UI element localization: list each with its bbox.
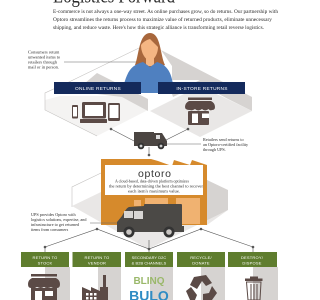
connector: devices to truck to store: [110, 128, 189, 156]
channel: return to vendor: VENDOR: [88, 260, 106, 266]
panel: in-store returns hexagon: [150, 50, 252, 137]
channel: destroy dispose: DISPOSE: [242, 260, 262, 266]
callout: consumers: unwanted items to: [28, 54, 61, 60]
callout: consumers: retailers through: [28, 60, 58, 64]
panel: optoro warehouse: [101, 159, 207, 225]
channel: return to stock: [21, 252, 69, 267]
icon: store: [185, 98, 215, 125]
channel: return to stock: STOCK: [38, 260, 52, 266]
intro text: [53, 10, 279, 31]
panel: optoro warehouse: each item's maximum value.: [128, 190, 180, 194]
online returns heading: [54, 82, 141, 94]
callout: retailers: Retailers send returns to: [203, 137, 244, 142]
intro text: Optoro streamlines the returns process to maximize value of returned products, eliminate unnecessary: [53, 18, 273, 23]
channel column backgrounds: [45, 267, 278, 300]
panel: online returns hexagon: [45, 48, 148, 136]
channel: secondary channels: SECONDARY D2C: [132, 255, 166, 260]
callout: UPS: [31, 212, 117, 232]
optoro logo: optoro: [138, 168, 171, 180]
channel: recycle donate: RECYCLE/: [190, 255, 212, 260]
callout: consumers: [28, 50, 138, 70]
channel: return to vendor: RETURN TO: [84, 255, 110, 260]
channel: recycle donate: [177, 252, 225, 267]
in-store returns heading: IN-STORE RETURNS: [176, 86, 228, 92]
channel: return to vendor: [72, 252, 121, 267]
logos: blinq bulq: [129, 276, 169, 300]
callout: retailers: through UPS.: [203, 147, 226, 152]
channel: destroy dispose: [228, 252, 277, 267]
icon: factory: [82, 275, 108, 300]
channel: return to stock: RETURN TO: [32, 255, 58, 260]
icon: large truck: [117, 204, 184, 238]
intro text: shipping, and reduce waste. Here's how this strategic alliance is transforming retail reverse logistics.: [53, 26, 264, 31]
icon: trash can: [245, 276, 262, 300]
intro text: E-commerce is not always a one-way street. As online purchases grow, so do returns. Our partnership with: [53, 10, 279, 15]
callout: retailers: an Optoro-certified facility: [203, 142, 249, 147]
panel: lower isometric floor: [72, 173, 228, 249]
icon: recycle: [186, 275, 217, 300]
callout: retailers: [167, 137, 249, 152]
in-store returns heading: [158, 82, 245, 94]
logos: blinq bulq: BLINQ: [133, 276, 165, 287]
optoro description: A cloud-based, data-driven platform optimizes: [115, 180, 189, 184]
channel: destroy dispose: DESTROY/: [241, 255, 264, 260]
icon: devices: [72, 102, 120, 123]
callout: consumers: Consumers return: [28, 50, 60, 54]
callout: UPS: infrastructure to get returned: [31, 222, 80, 227]
icon: small truck: [134, 132, 167, 149]
callout: UPS: items from consumers: [31, 227, 69, 232]
online returns heading: ONLINE RETURNS: [75, 86, 121, 92]
callout: consumers: mail or in person.: [28, 64, 59, 70]
connectors to channels: [44, 228, 254, 252]
channel: recycle donate: DONATE: [192, 260, 210, 266]
callout: UPS: UPS provides Optoro with: [31, 212, 76, 217]
channel: secondary channels: & B2B CHANNELS: [132, 260, 167, 266]
channel: secondary channels: [125, 252, 173, 267]
icon: stock store: [28, 274, 60, 300]
panel: optoro warehouse: the return by determining the best channel to recover: [109, 184, 204, 188]
icon: person: [124, 33, 173, 93]
callout: UPS: logistics solutions, expertise, and: [31, 217, 87, 223]
